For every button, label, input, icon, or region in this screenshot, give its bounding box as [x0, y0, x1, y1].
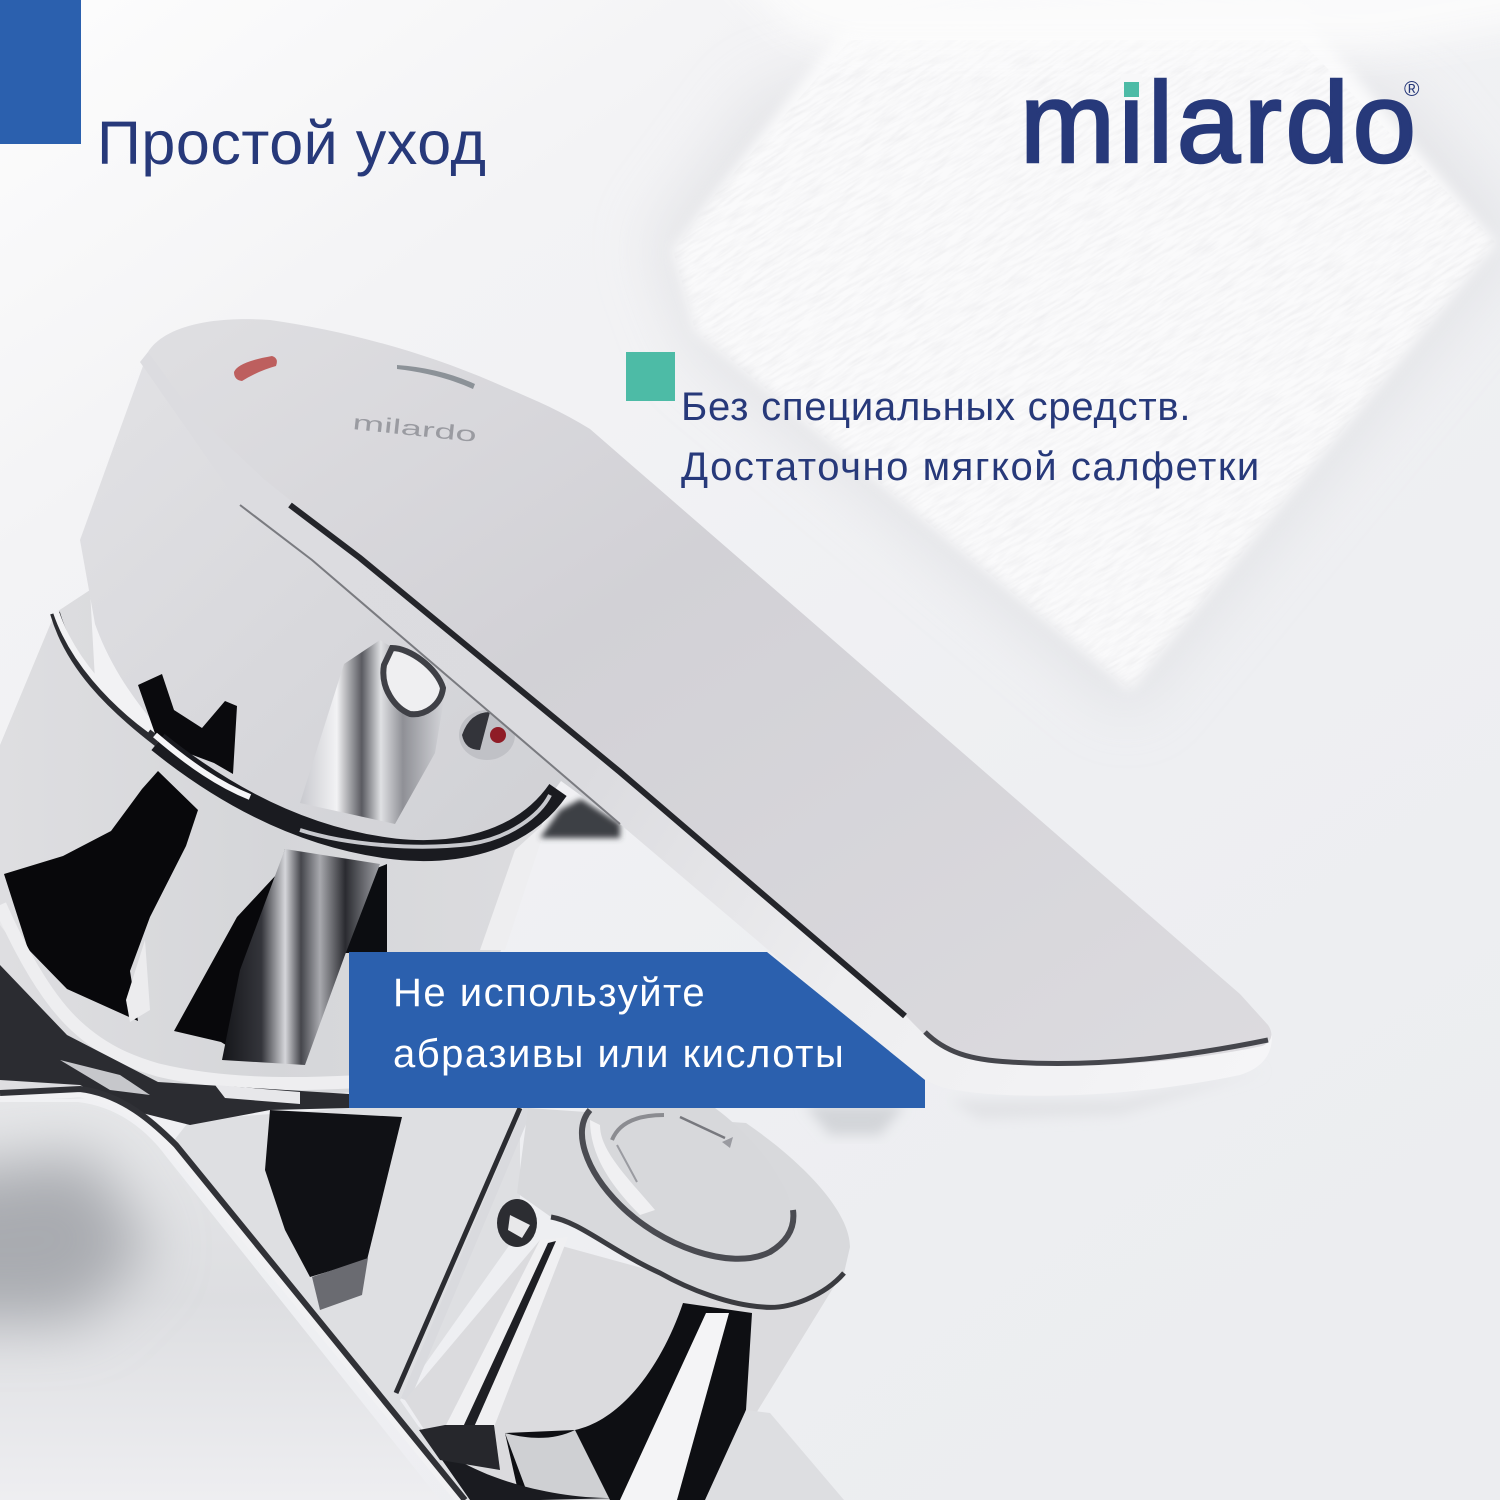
corner square: [0, 0, 81, 144]
faucet: deck chrome edge: [0, 1093, 460, 1500]
text block: care advice: Без специальных средств.: [681, 385, 1191, 429]
title: Простой уход: [97, 109, 486, 177]
faucet: small chrome button: [497, 1199, 537, 1247]
faucet: upper cartridge tube: [300, 640, 447, 824]
base right side: [705, 1410, 844, 1500]
faucet: lever top face: [148, 319, 1271, 1066]
logo registered mark: ®: [1404, 78, 1419, 101]
faucet: diverter stem: [405, 1240, 838, 1500]
text block: care advice: Достаточно мягкой салфетки: [681, 445, 1261, 489]
callout: warning: [349, 952, 925, 1108]
faucet: chrome ring: [55, 612, 558, 851]
faucet: bottom rim of body: [0, 905, 350, 1084]
callout: warning: Не используйте: [393, 971, 706, 1015]
faucet engraved logo: milardo: [352, 411, 478, 447]
teal square: [626, 352, 675, 401]
faucet: neck behind the deck edge: [172, 1108, 520, 1500]
faucet: lever front chamfer: [140, 352, 1272, 1096]
logo dot cover: [1121, 74, 1142, 82]
cloth: [661, 0, 1500, 679]
faucet: diverter rods: [396, 1108, 528, 1400]
faucet: lever underside: [80, 352, 620, 850]
faucet: small wedge behind: [540, 799, 620, 838]
faucet: main body: [0, 590, 546, 1100]
faucet: deck plate: [0, 1102, 366, 1419]
faucet: dark edge lines on lever: [240, 505, 1268, 1064]
logo teal dot: [1124, 82, 1139, 97]
logo: [1020, 60, 1420, 187]
faucet: black reflections on body: [4, 771, 198, 1021]
logo wordmark: milardo: [1020, 60, 1420, 187]
faucet: chrome rod: [445, 1237, 568, 1427]
faucet: lower tube: [222, 849, 380, 1065]
icon: hot mark: [234, 356, 277, 381]
faucet: [0, 319, 1272, 1500]
faucet: diverter head: [517, 1108, 850, 1308]
text block: care advice: [681, 385, 1261, 489]
icon: cold mark: [397, 365, 475, 389]
faucet: red temperature button: [459, 710, 515, 760]
faucet: black reflection under lever: [138, 674, 237, 774]
faucet: diverter cap with icons: [581, 1108, 793, 1259]
shadow under lever: [805, 1070, 1265, 1135]
callout: warning: абразивы или кислоты: [393, 1032, 845, 1076]
